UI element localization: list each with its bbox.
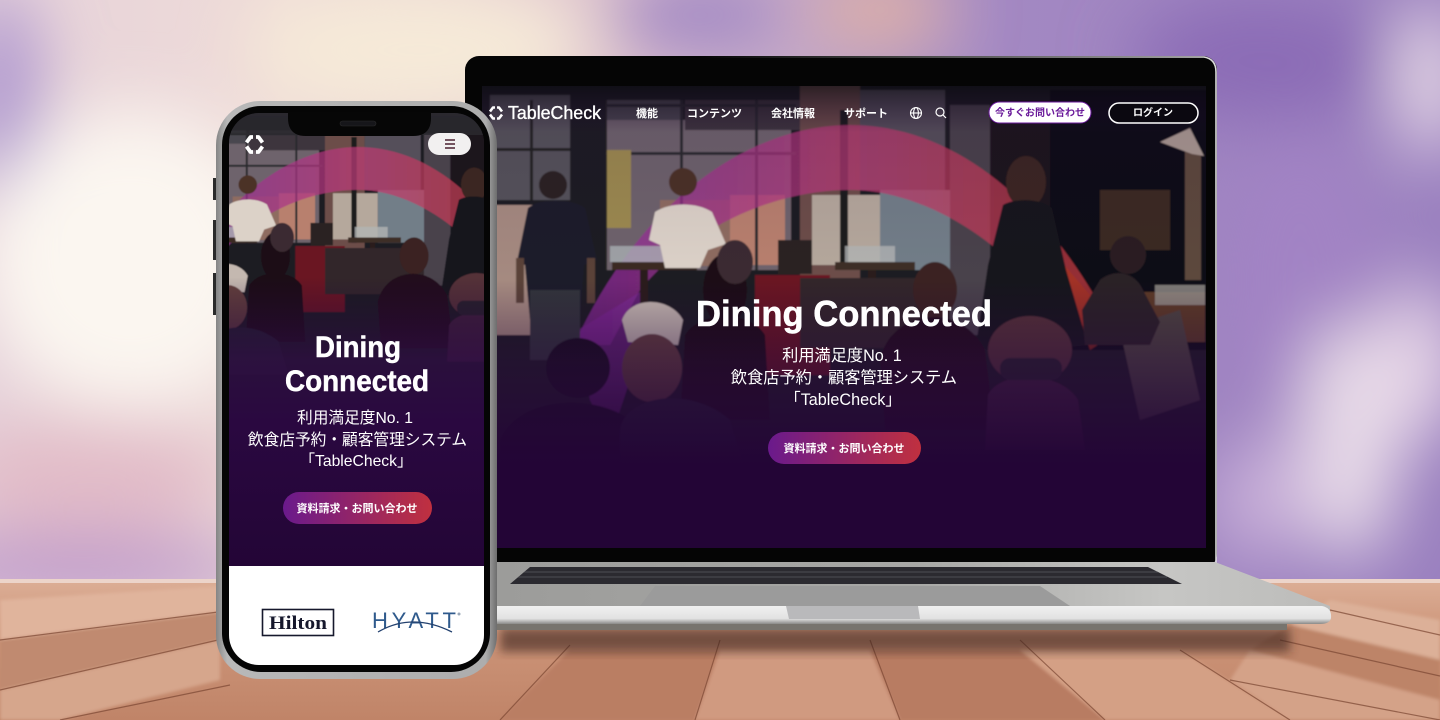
logo mark (490, 108, 502, 118)
phone (213, 101, 497, 679)
laptop call to action (768, 432, 921, 464)
brand name: TableCheck (508, 103, 602, 123)
laptop navigation bar: サポート (844, 107, 888, 120)
contact button (989, 102, 1091, 123)
white logo band (229, 566, 484, 666)
phone hero heading (285, 331, 429, 398)
phone hero subtext (248, 409, 467, 470)
phone logo mark (246, 137, 262, 152)
laptop navigation bar: 機能 (636, 106, 658, 120)
contact button: 今すぐお問い合わせ (995, 106, 1085, 119)
laptop hero subtext: 飲食店予約・顧客管理システム (731, 369, 957, 387)
wooden table (0, 579, 1440, 720)
laptop (465, 56, 1331, 630)
phone hero subtext: 「TableCheck」 (299, 452, 413, 470)
laptop navigation bar: コンテンツ (687, 107, 742, 120)
phone hero heading: Connected (285, 365, 429, 398)
laptop lid and bezel (465, 56, 1217, 568)
phone frame (216, 101, 497, 679)
Hilton logo: Hilton (269, 613, 327, 634)
Hyatt logo: HYATT (372, 608, 456, 633)
notch (288, 112, 431, 136)
phone screen: hero photo (229, 113, 484, 665)
icon: globe (910, 108, 922, 118)
login button (1109, 103, 1198, 123)
login button: ログイン (1133, 106, 1173, 119)
side buttons (213, 178, 216, 315)
phone call to action: 資料請求・お問い合わせ (296, 501, 418, 515)
laptop call to action: 資料請求・お問い合わせ (784, 441, 904, 455)
laptop navigation bar: 会社情報 (771, 106, 815, 120)
phone hero heading: Dining (315, 331, 401, 364)
laptop screen: hero photo (470, 80, 1230, 560)
trackpad (640, 586, 1070, 606)
laptop hero heading: Dining Connected (696, 293, 992, 334)
phone call to action (283, 492, 432, 524)
laptop hero subtext: 「TableCheck」 (785, 391, 901, 409)
phone hero subtext: 飲食店予約・顧客管理システム (248, 431, 467, 449)
laptop hero subtext (731, 347, 957, 409)
Hilton logo (262, 610, 334, 636)
icon: search (936, 108, 946, 118)
laptop notch (786, 606, 920, 619)
laptop hero subtext: 利用満足度No. 1 (782, 347, 902, 365)
laptop base deck (497, 562, 1330, 612)
phone hero subtext: 利用満足度No. 1 (297, 409, 413, 427)
keyboard (510, 567, 1182, 584)
phone menu button (428, 133, 471, 155)
laptop front lip (497, 606, 1331, 624)
laptop navigation bar (490, 102, 1198, 123)
